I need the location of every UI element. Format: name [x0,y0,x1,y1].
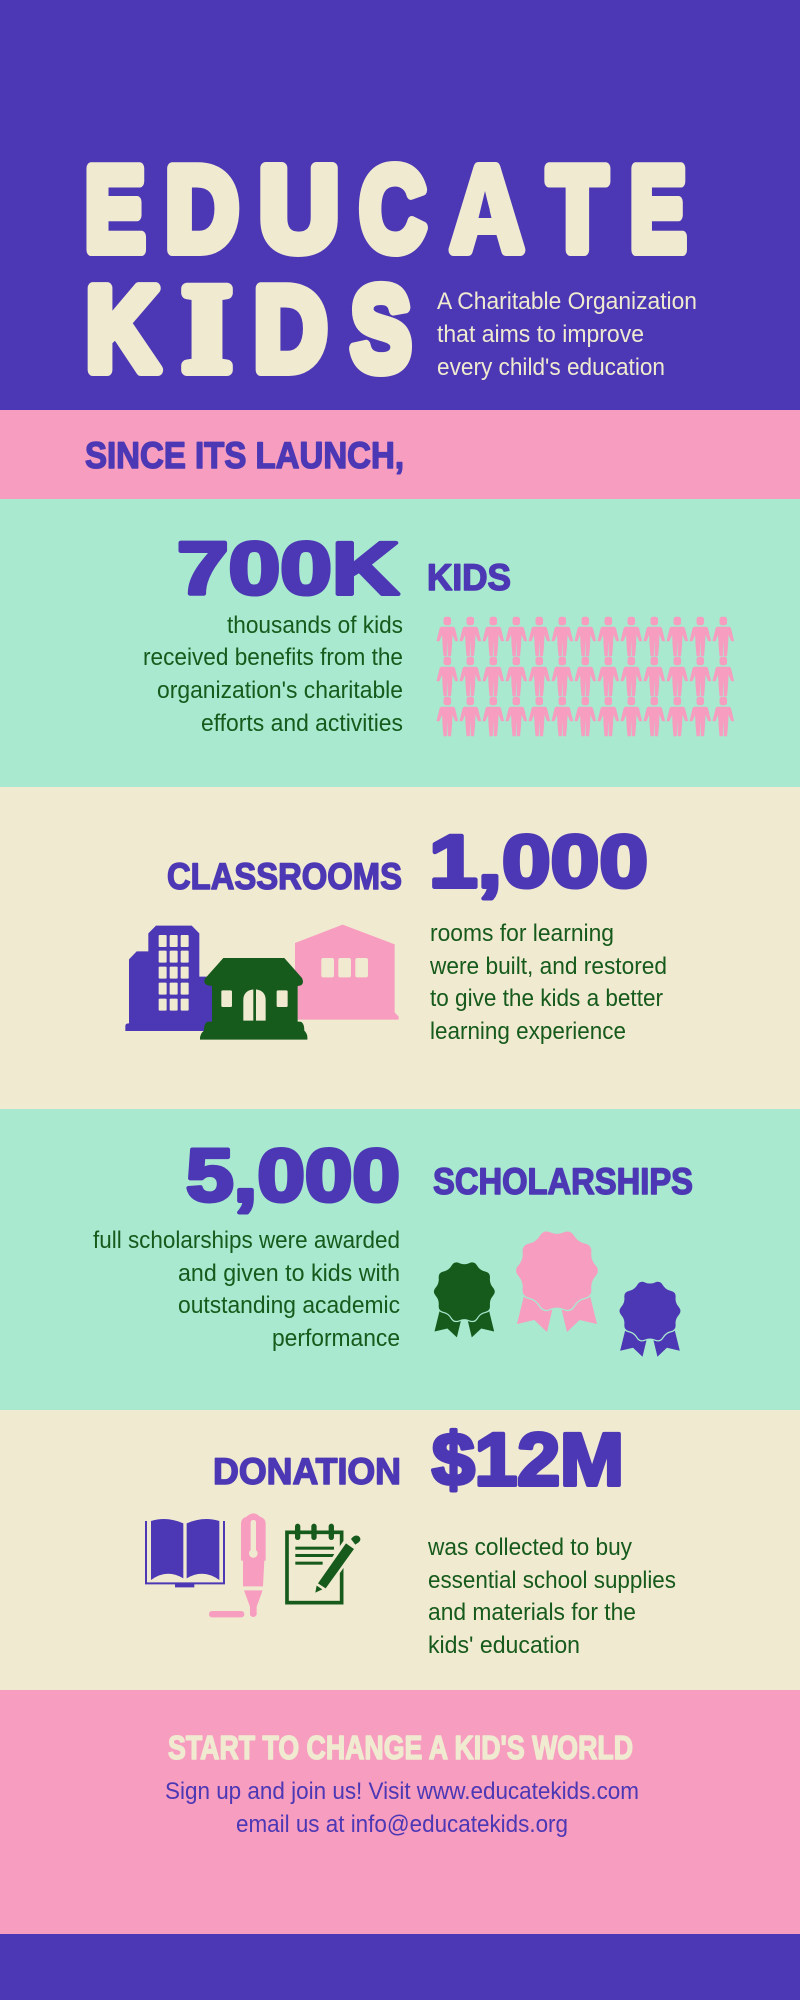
text: kids description: thousands of kids [227,612,403,639]
icon: purple tower [125,926,213,1031]
title: EDUCATE: T [548,143,607,276]
text: contact details: Sign up and join us! Visit www.educatekids.com [165,1778,639,1805]
text: kids description: received benefits from the [143,644,403,671]
icon: purple ribbon [619,1282,680,1357]
heading: since its launch: SINCE ITS LAUNCH, [85,435,404,476]
number: 700K: 700K [177,527,399,610]
icon: pink building [295,925,399,1020]
text: classrooms description [429,920,667,1045]
icon: notepad and pencil [287,1524,360,1603]
icon: open book [145,1519,225,1587]
icon: rows of children [437,617,734,736]
heading: classrooms: CLASSROOMS [167,856,402,897]
text: donation description: and materials for the [428,1599,636,1626]
subtitle: that aims to improve [437,321,644,348]
panel: call to action [0,1690,800,1934]
panel: since its launch [0,410,800,499]
icon: pen [209,1513,266,1617]
title: KIDS: S [351,263,411,396]
text: scholarships description [93,1227,400,1352]
text: classrooms description: were built, and restored [429,953,667,980]
title: KIDS: D [254,263,327,396]
text: classrooms description: rooms for learning [430,920,614,947]
panel: classrooms [0,787,800,1109]
title: KIDS: I [183,260,231,397]
title: EDUCATE: E [630,143,686,276]
title: EDUCATE: E [85,143,145,276]
text: contact details: email us at info@educatekids.org [236,1811,568,1838]
heading: scholarships: SCHOLARSHIPS [433,1161,693,1202]
text: donation description: kids' education [428,1632,580,1659]
icon: pink ribbon [516,1231,598,1332]
panel: scholarships [0,1109,800,1410]
text: kids description: organization's charitable [157,677,403,704]
number: $12M: $12M [432,1418,624,1501]
icon: school buildings [125,925,399,1040]
text: contact details [165,1778,639,1838]
subtitle: every child's education [437,354,665,381]
text: scholarships description: full scholarships were awarded [93,1227,400,1254]
title: EDUCATE: D [166,143,238,276]
text: kids description: efforts and activities [201,710,403,737]
number: 1,000: 1,000 [429,820,648,903]
text: scholarships description: performance [272,1325,400,1352]
text: donation description [427,1534,676,1659]
subtitle: A Charitable Organization [437,288,697,315]
panel: footer band [0,1934,800,2000]
title: EDUCATE: U [259,143,339,276]
text: classrooms description: learning experience [430,1018,626,1045]
subtitle [437,288,697,381]
icon: school supplies [145,1513,360,1617]
text: scholarships description: outstanding academic [178,1292,400,1319]
text: donation description: essential school supplies [428,1567,676,1594]
panel: kids [0,499,800,787]
heading: donation: DONATION [213,1451,401,1492]
title: KIDS [86,260,411,397]
title: EDUCATE: C [360,143,426,276]
panel: header [0,0,800,410]
text: kids description [143,612,403,737]
icon: counter of title letter A [478,191,492,218]
title: EDUCATE: A [451,143,523,276]
icon: award ribbons [434,1231,680,1357]
icon: green ribbon [434,1262,495,1337]
heading: call to action: START TO CHANGE A KID'S WORLD [168,1729,633,1766]
text: scholarships description: and given to kids with [178,1260,400,1287]
title: EDUCATE [85,143,686,276]
title: KIDS: K [86,263,159,396]
panel: donation [0,1410,800,1690]
number: 5,000: 5,000 [186,1134,400,1217]
text: donation description: was collected to buy [427,1534,632,1561]
text: classrooms description: to give the kids a better [430,985,663,1012]
heading: kids: KIDS [427,557,511,598]
icon: green schoolhouse [200,958,307,1040]
